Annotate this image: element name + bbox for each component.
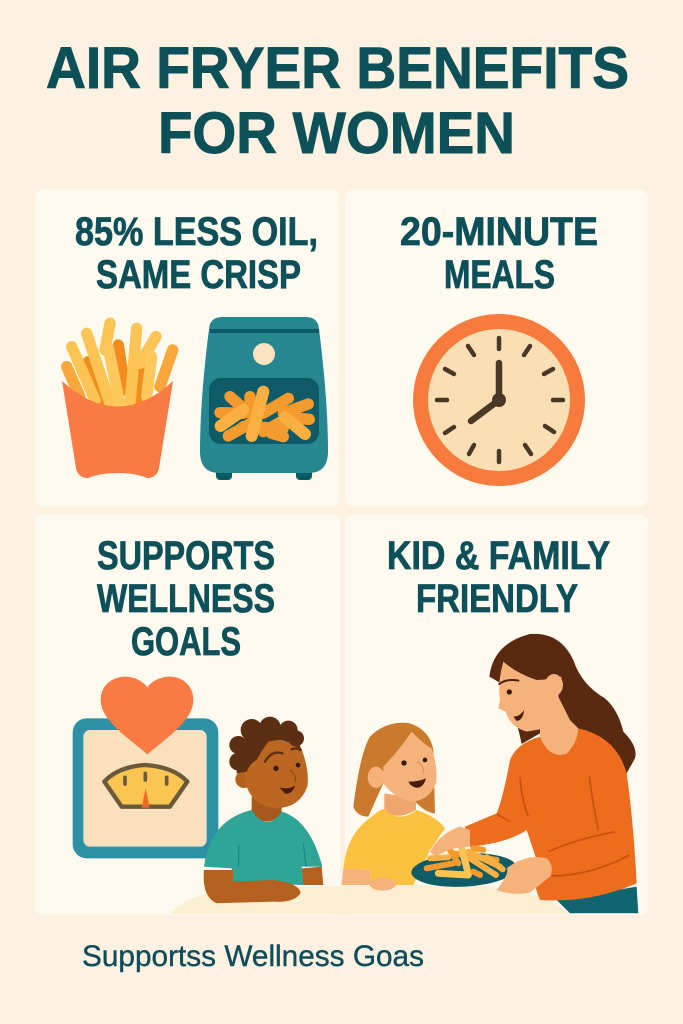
title: FOR WOMEN [158, 101, 515, 166]
table [170, 885, 570, 914]
heading: kid and family friendly [387, 534, 610, 621]
heading: 20-minute meals: 20-MINUTE [400, 210, 598, 254]
heading: kid and family friendly: FRIENDLY [416, 577, 578, 621]
girl and woman [342, 634, 638, 913]
icon: scale with heart [73, 677, 218, 858]
boy [204, 717, 323, 903]
title [46, 36, 629, 166]
girl [342, 723, 445, 891]
heading: supports wellness goals: SUPPORTS [97, 534, 275, 578]
heading: 85% less oil [75, 210, 318, 297]
icon: french fries [62, 323, 173, 478]
heading: 20-minute meals [400, 210, 598, 297]
heading: 85% less oil: 85% LESS OIL, [75, 210, 318, 254]
heading: supports wellness goals: GOALS [131, 620, 241, 664]
title: AIR FRYER BENEFITS [46, 36, 629, 101]
woman [465, 634, 638, 913]
heading: supports wellness goals: WELLNESS [97, 577, 275, 621]
plate of fries [411, 848, 517, 889]
panel: 20-minute meals [345, 190, 648, 506]
icon: air fryer [200, 317, 328, 480]
heading: supports wellness goals [97, 534, 275, 664]
sub: fries in basket [220, 392, 309, 437]
footer caption: Supportss Wellness Goas [82, 940, 424, 973]
heading: 85% less oil: SAME CRISP [96, 253, 301, 297]
family scene [170, 634, 638, 914]
panel: supports wellness goals [35, 515, 340, 915]
panel: kid and family friendly [345, 515, 648, 915]
heading: 20-minute meals: MEALS [444, 253, 555, 297]
icon: clock [413, 314, 585, 486]
panel: 85% less oil [35, 190, 339, 506]
hands [430, 827, 552, 894]
heading: kid and family friendly: KID & FAMILY [387, 534, 610, 578]
